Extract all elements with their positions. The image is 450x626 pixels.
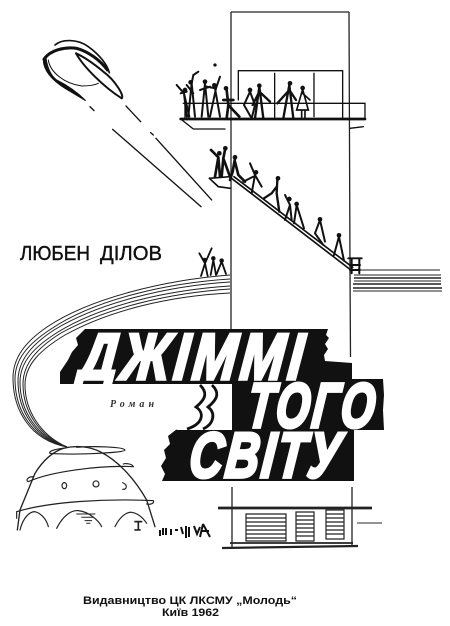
domed building <box>17 447 155 530</box>
icon: spaceship with trails <box>43 41 212 207</box>
balcony people <box>177 63 310 118</box>
author name: ЛЮБЕН <box>20 243 90 265</box>
title black band <box>60 329 384 481</box>
entrance building at tower base <box>218 508 382 548</box>
publisher text: Київ 1962 <box>162 607 219 619</box>
letter З with white backing <box>176 384 232 430</box>
title: ДЖІММІ: ДЖІММІ <box>72 320 309 393</box>
author name <box>20 243 162 265</box>
tower outline <box>231 12 352 547</box>
right side bridge lines <box>353 270 442 291</box>
title: СВІТУ: СВІТУ <box>187 420 347 491</box>
title: ТОГО: ТОГО <box>245 371 379 441</box>
row of small people by the dome <box>160 524 210 538</box>
publisher text <box>83 595 297 619</box>
curved bridge ramp lines <box>13 275 230 447</box>
publisher text: Видавництво ЦК ЛКСМУ „Молодь“ <box>83 595 297 607</box>
staircase with people <box>209 146 362 273</box>
upper platform with railing and room frame <box>177 63 365 129</box>
group of three people on the bridge <box>199 248 226 276</box>
subtitle: Роман: Роман <box>110 399 154 410</box>
author name: ДІЛОВ <box>100 243 162 265</box>
